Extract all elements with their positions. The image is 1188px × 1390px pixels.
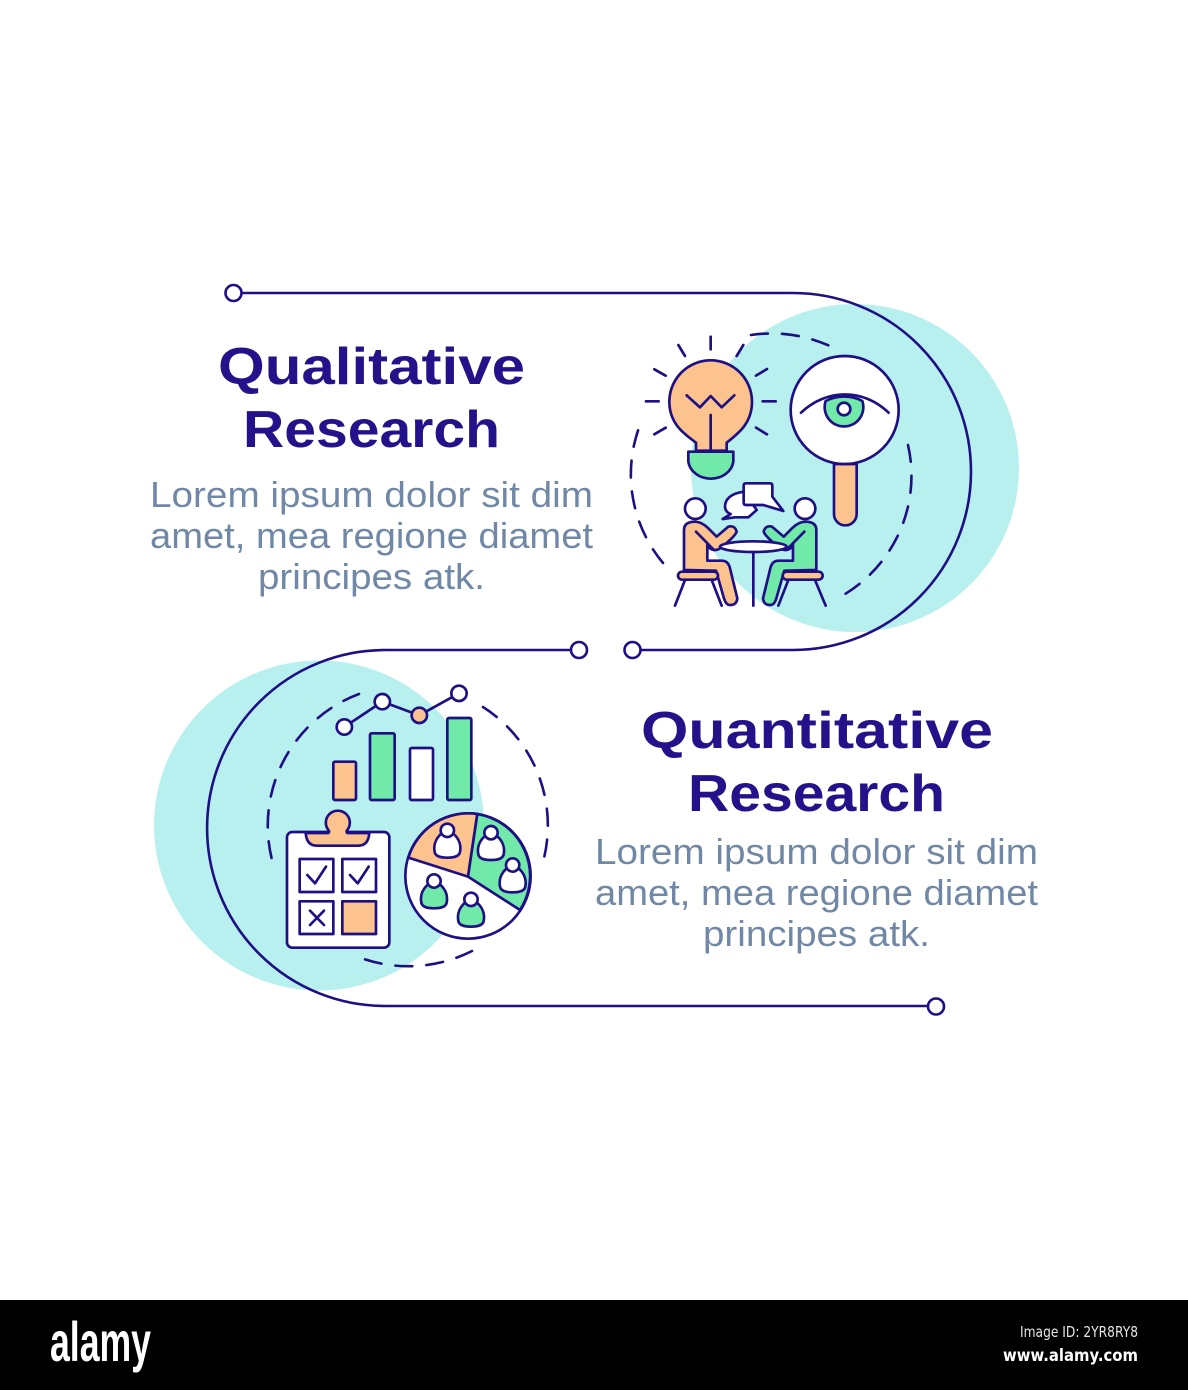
text block: quantitative description: principes atk.	[703, 913, 930, 954]
footer website: www.alamy.com	[1003, 1346, 1138, 1366]
chart: bars with trend line	[333, 686, 471, 800]
panel: quantitative research	[154, 642, 1038, 1014]
text block: qualitative description	[150, 474, 593, 597]
heading: qualitative research: Qualitative	[218, 338, 525, 396]
icon: light bulb	[646, 337, 776, 479]
icon: quantitative research	[287, 686, 531, 948]
connector line: qualitative	[226, 285, 971, 658]
footer image id: Image ID: 2YR8RY8	[1020, 1323, 1138, 1341]
text block: quantitative description: amet, mea regione diamet	[595, 872, 1038, 913]
heading: quantitative research: Quantitative	[641, 702, 993, 760]
dashed ring: qualitative	[631, 333, 911, 597]
icon: qualitative research	[646, 337, 899, 606]
chart: population pie	[405, 813, 531, 939]
icon: survey clipboard	[287, 811, 389, 948]
panel: qualitative research	[150, 285, 1019, 658]
text block: qualitative description: Lorem ipsum dolor sit dim	[150, 474, 593, 515]
text block: qualitative description: principes atk.	[258, 556, 485, 597]
heading: quantitative research: Research	[688, 765, 945, 823]
footer logo: alamy	[50, 1310, 151, 1373]
footer bar	[0, 1300, 1188, 1390]
teal blob: quantitative	[154, 660, 484, 990]
connector line: quantitative	[207, 642, 944, 1014]
teal blob: qualitative	[691, 304, 1019, 632]
text block: quantitative description	[595, 831, 1038, 954]
heading: quantitative research	[641, 702, 993, 823]
text block: quantitative description: Lorem ipsum dolor sit dim	[595, 831, 1038, 872]
heading: qualitative research	[218, 338, 525, 459]
text block: qualitative description: amet, mea regione diamet	[150, 515, 593, 556]
dashed ring: quantitative	[268, 694, 548, 966]
icon: two people talking at a table	[675, 483, 826, 606]
heading: qualitative research: Research	[243, 401, 500, 459]
icon: magnifier with eye	[791, 356, 899, 525]
